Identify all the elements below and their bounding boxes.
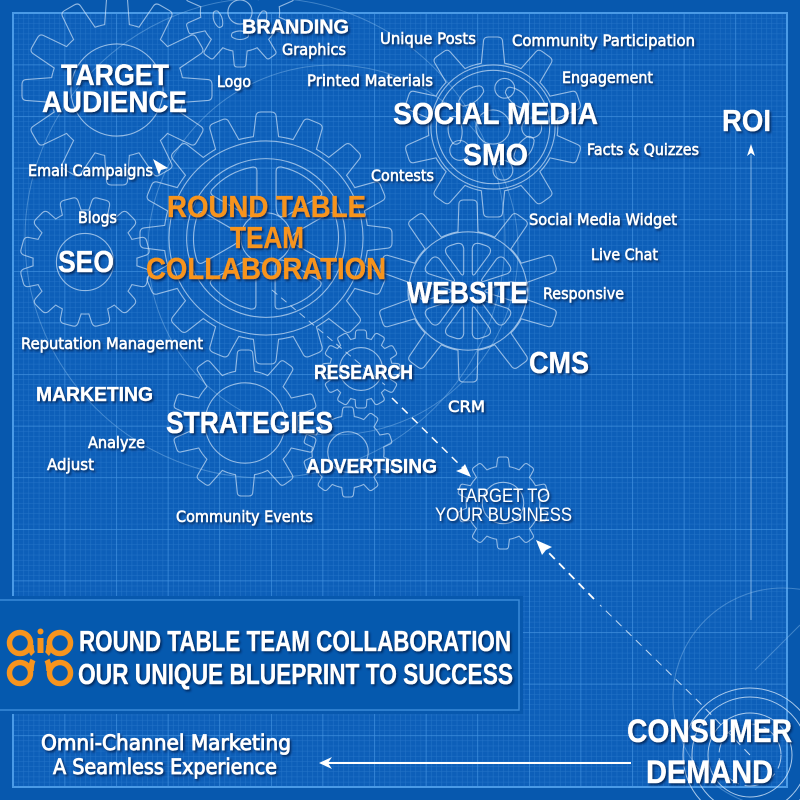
label: website: WEBSITE	[407, 275, 528, 310]
label: live chat: Live Chat	[591, 245, 658, 264]
title: round table: ROUND TABLE	[167, 189, 366, 224]
label: advertising: ADVERTISING	[306, 456, 437, 478]
arrow: consumer demand to target	[536, 540, 750, 755]
label: analyze: Analyze	[88, 433, 145, 452]
gear: advertising	[302, 407, 394, 497]
arrow: big gear to research	[272, 290, 385, 385]
label: logo: Logo	[217, 72, 251, 91]
gear: target to your business	[456, 457, 550, 549]
label: ROI: ROI	[722, 103, 771, 138]
label: graphics: Graphics	[282, 40, 346, 59]
banner line 2: OUR UNIQUE BLUEPRINT TO SUCCESS	[78, 659, 513, 691]
label: your business: YOUR BUSINESS	[435, 505, 572, 526]
a seamless experience: A Seamless Experience	[53, 755, 277, 779]
arrow: consumer demand to omni-channel	[319, 757, 631, 769]
label: strategies: STRATEGIES	[166, 405, 333, 440]
label: social media widget: Social Media Widget	[529, 210, 677, 229]
label: SEO: SEO	[58, 244, 114, 279]
gear: SEO	[5, 182, 165, 342]
label: audience: AUDIENCE	[42, 86, 187, 119]
label: community events: Community Events	[176, 507, 313, 526]
footer labels	[41, 713, 792, 790]
title: collaboration: COLLABORATION	[146, 251, 386, 286]
title: team: TEAM	[230, 220, 304, 255]
label: CMS: CMS	[529, 345, 589, 380]
label: printed materials: Printed Materials	[307, 71, 433, 90]
label: reputation management: Reputation Management	[21, 334, 203, 353]
label: email campaigns: Email Campaigns	[28, 161, 153, 180]
label: unique posts: Unique Posts	[380, 29, 476, 48]
arrow: research to target	[392, 398, 471, 477]
label: engagement: Engagement	[562, 68, 653, 87]
gear: research	[322, 330, 400, 408]
gear: target audience	[22, 0, 212, 185]
label: responsive: Responsive	[543, 284, 624, 303]
gear: branding	[184, 0, 296, 67]
label: contests: Contests	[371, 166, 434, 185]
gear: strategies	[171, 350, 319, 496]
banner line 1: ROUND TABLE TEAM COLLABORATION	[79, 626, 511, 658]
gear: website	[376, 200, 560, 382]
gear rings: consumer demand	[683, 688, 800, 800]
label: adjust: Adjust	[47, 455, 94, 474]
label: marketing: MARKETING	[36, 384, 153, 406]
panel: banner	[0, 600, 519, 710]
arrow: to target audience	[153, 159, 168, 175]
label: branding: BRANDING	[242, 16, 349, 38]
label: facts and quizzes: Facts & Quizzes	[587, 140, 699, 159]
label: blogs: Blogs	[78, 208, 117, 227]
omni-channel marketing: Omni-Channel Marketing	[41, 731, 291, 755]
gear: round table team collaboration	[140, 112, 392, 364]
label: research: RESEARCH	[314, 362, 413, 384]
arrow: up to ROI	[747, 144, 755, 620]
gear: social media SMO	[401, 37, 585, 217]
label: CRM: CRM	[448, 397, 485, 416]
label: target: TARGET	[61, 59, 169, 92]
label: target to: TARGET TO	[457, 486, 550, 507]
label: social media: SOCIAL MEDIA	[393, 96, 598, 131]
label: SMO: SMO	[463, 137, 528, 172]
banner text	[78, 626, 513, 691]
demand: DEMAND	[646, 754, 773, 790]
gear labels	[21, 16, 771, 526]
label: community participation: Community Participation	[512, 31, 695, 50]
icon: logo	[10, 628, 70, 684]
